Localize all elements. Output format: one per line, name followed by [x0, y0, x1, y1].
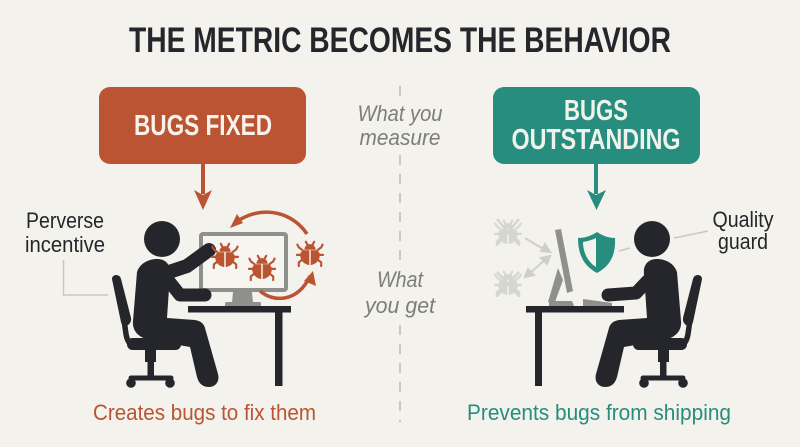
arrow down: teal	[587, 164, 606, 210]
person at desk	[596, 221, 701, 388]
leader line	[64, 260, 108, 295]
metric box: bugs fixed: BUGS FIXED	[134, 110, 272, 142]
label: what you get: you get	[363, 293, 436, 318]
label: quality guard: Quality	[712, 207, 774, 232]
label: perverse incentive: incentive	[25, 232, 105, 257]
center divider	[399, 86, 401, 422]
arrow down: red	[194, 164, 212, 210]
icon: shield	[578, 232, 615, 273]
label: what you measure: What you	[358, 101, 442, 126]
label: quality guard	[712, 207, 774, 254]
monitor	[201, 234, 286, 307]
caption: creates bugs: Creates bugs to fix them	[93, 400, 316, 425]
bug on screen 1	[212, 244, 238, 268]
monitor side view	[548, 229, 612, 306]
leader lines	[619, 231, 708, 251]
metric box: bugs outstanding: BUGS	[564, 95, 628, 127]
metric box: bugs fixed	[99, 87, 306, 164]
label: what you get: What	[377, 267, 424, 292]
caption: prevents bugs: Prevents bugs from shipping	[467, 400, 731, 425]
bug on screen 2	[249, 256, 275, 280]
blocked bug 1	[495, 219, 521, 245]
person at desk	[113, 221, 218, 388]
desk	[526, 306, 624, 386]
label: quality guard: guard	[718, 229, 768, 254]
cycle arrows	[230, 212, 316, 298]
label: perverse incentive	[25, 208, 105, 257]
label: what you get	[363, 267, 436, 318]
desk	[188, 306, 291, 386]
panel: bugs fixed	[25, 87, 323, 425]
deflection arrows	[525, 238, 550, 277]
label: what you measure: measure	[360, 125, 440, 150]
metric box: bugs outstanding	[493, 87, 700, 164]
blocked bug 2	[495, 272, 521, 296]
panel: bugs outstanding	[467, 87, 774, 425]
bug outside screen	[297, 242, 323, 266]
metric box: bugs outstanding: OUTSTANDING	[512, 124, 680, 156]
label: what you measure	[358, 101, 442, 150]
label: perverse incentive: Perverse	[26, 208, 104, 233]
title: THE METRIC BECOMES THE BEHAVIOR	[129, 21, 671, 60]
